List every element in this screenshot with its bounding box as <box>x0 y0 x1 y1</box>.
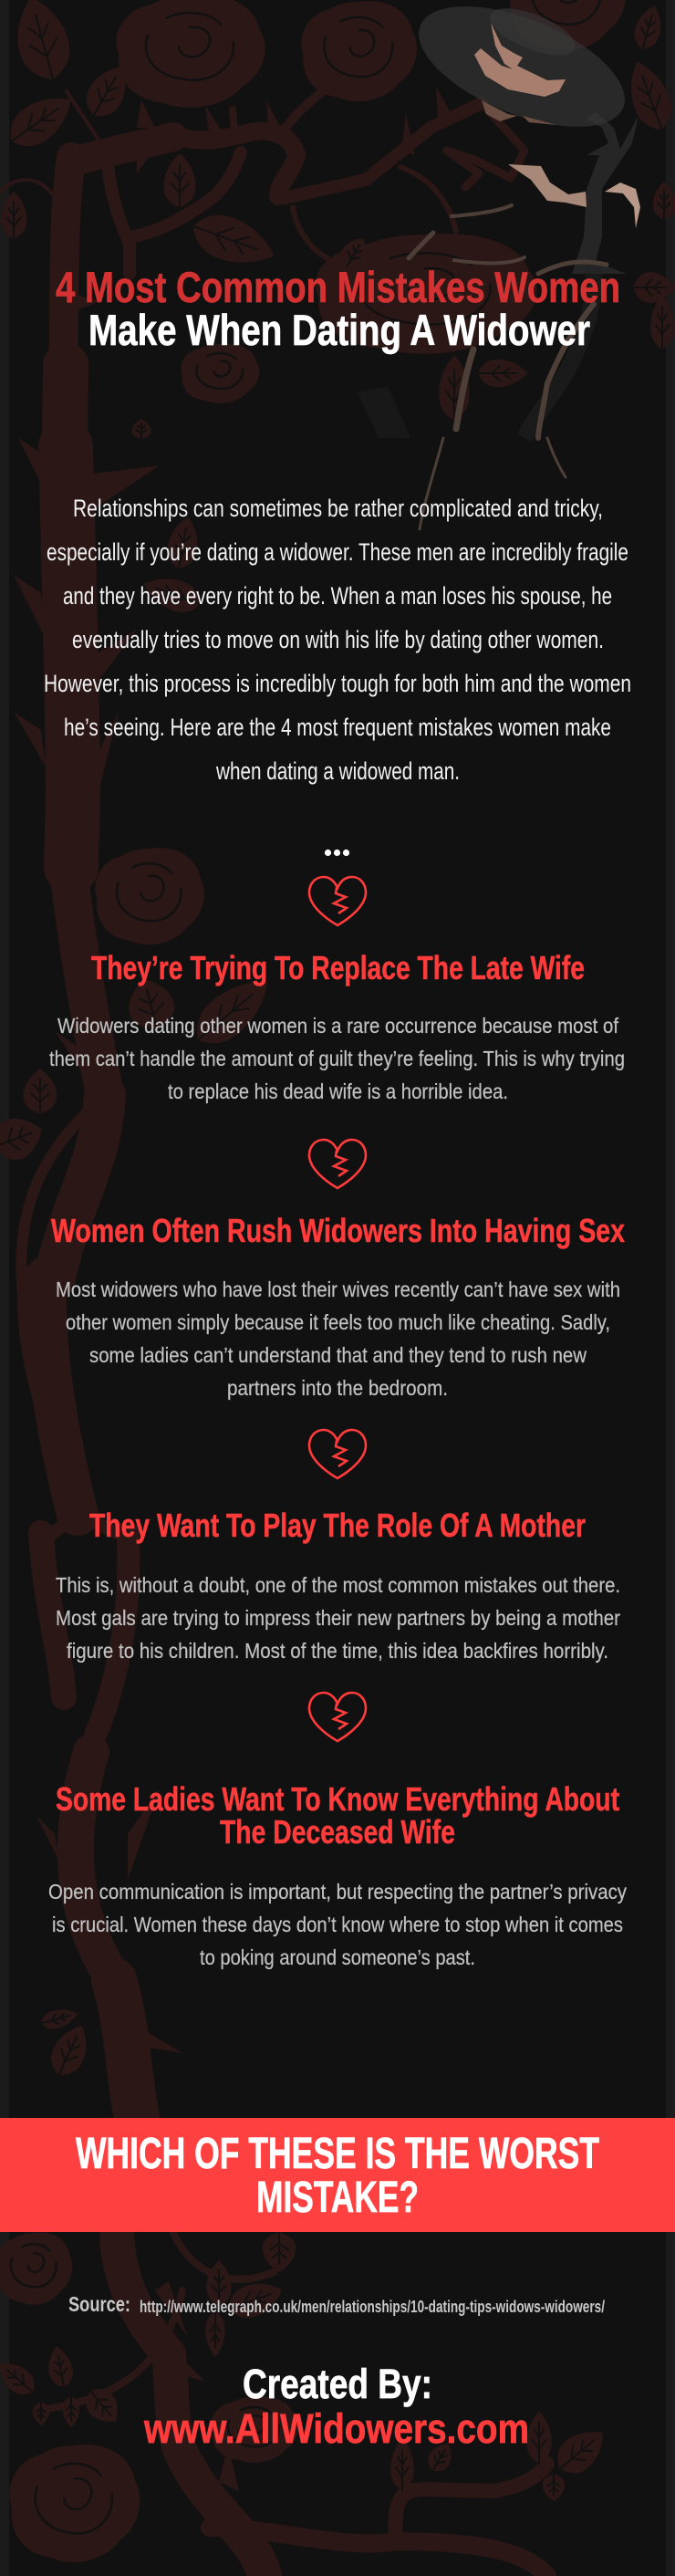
face highlight <box>482 100 556 125</box>
section 3 <box>56 1430 620 1663</box>
call-to-action band <box>0 2118 675 2232</box>
body 1: to replace his dead wife is a horrible idea. <box>168 1079 508 1103</box>
vines and trunk <box>0 91 547 2576</box>
title <box>56 263 620 354</box>
heading 4 <box>56 1780 619 1851</box>
icon: broken heart 4 <box>309 1693 366 1741</box>
section 1 <box>49 877 625 1103</box>
icon: broken heart 1 <box>309 877 366 925</box>
neck and arm <box>508 164 587 207</box>
section 2 <box>51 1140 625 1400</box>
body 3 <box>56 1573 620 1663</box>
body 3: figure to his children. Most of the time, this idea backfires horribly. <box>67 1639 608 1663</box>
source line <box>68 2292 605 2316</box>
section 4 <box>48 1693 627 1969</box>
body 1: Widowers dating other women is a rare occurrence because most of <box>57 1014 619 1038</box>
ellipsis dots <box>325 850 349 856</box>
smoky lower dress <box>524 265 594 438</box>
heading 4: The Deceased Wife <box>220 1813 455 1851</box>
body 1 <box>49 1014 625 1103</box>
illustration: woman in a wide-brim hat <box>358 0 641 529</box>
body 2: partners into the bedroom. <box>227 1376 448 1400</box>
thorns <box>14 87 452 2491</box>
band background <box>0 2118 675 2232</box>
intro paragraph <box>44 495 631 785</box>
smoky dress <box>572 112 639 274</box>
crescent highlight <box>605 183 640 228</box>
hat crown <box>484 0 581 65</box>
source line: Source: <box>68 2292 130 2316</box>
hat band highlights <box>474 48 566 97</box>
body 2: some ladies can’t understand that and they tend to rush new <box>89 1343 587 1367</box>
band text: MISTAKE? <box>256 2174 419 2222</box>
intro paragraph: when dating a widowed man. <box>215 757 460 785</box>
leaves <box>6 0 78 86</box>
body 4: to poking around someone’s past. <box>200 1945 475 1969</box>
body 3: Most gals are trying to impress their new partners by being a mother <box>56 1606 620 1630</box>
icon: broken heart 3 <box>309 1430 366 1478</box>
credit label: Created By: <box>243 2361 432 2407</box>
skirt highlights <box>409 205 607 529</box>
body 4 <box>48 1880 627 1969</box>
left side strip <box>0 0 9 2576</box>
credit <box>143 2361 529 2452</box>
credit url: www.AllWidowers.com <box>143 2405 529 2452</box>
band text <box>76 2130 599 2222</box>
right side strip <box>666 0 675 2576</box>
hat brim <box>402 0 641 151</box>
body 2: other women simply because it feels too much like cheating. Sadly, <box>66 1310 610 1334</box>
body 2 <box>56 1278 620 1400</box>
icon: broken heart 2 <box>309 1140 366 1188</box>
roses <box>116 0 265 108</box>
